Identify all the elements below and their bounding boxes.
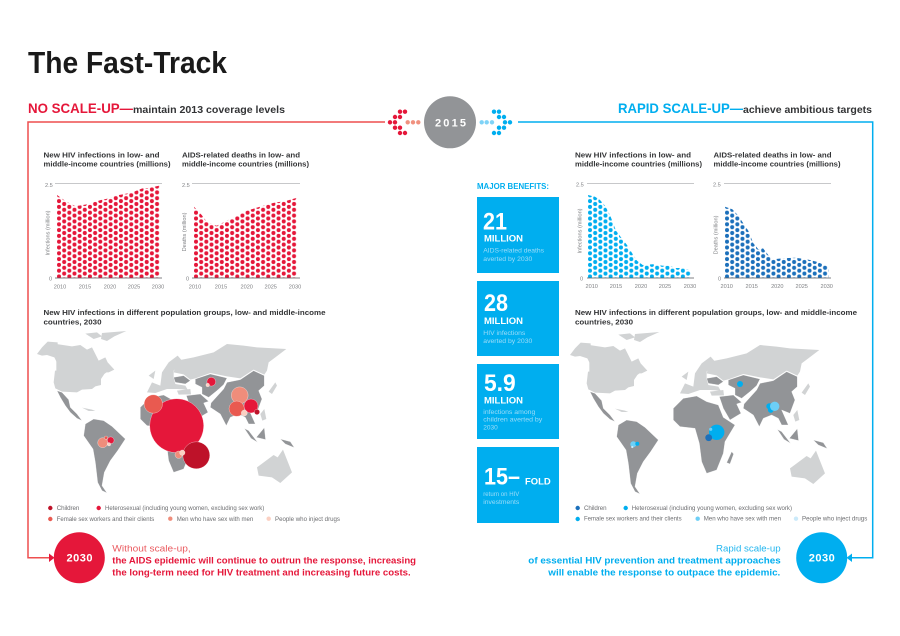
chart: new infections, rapid scale-up: New HIV infections in low- and: [575, 150, 692, 159]
chart: new infections, rapid scale-up: [575, 150, 703, 290]
chart: deaths, no scale-up: 2025: [264, 284, 277, 290]
heading: map, no scale-up: [44, 308, 326, 326]
map: rapid scale-up: [570, 332, 827, 494]
chart: deaths, no scale-up: 2010: [189, 284, 201, 290]
benefit panel: 21 million: MILLION: [484, 234, 523, 244]
conclusion: no scale-up: the long-term need for HIV treatment and increasing future costs.: [112, 568, 411, 579]
chart: new infections, no scale-up: 2030: [152, 284, 164, 290]
heading: map, rapid scale-up: [575, 308, 857, 326]
chart: deaths, no scale-up: AIDS-related deaths in low- and: [182, 150, 301, 159]
chart: deaths, rapid scale-up: Deaths (million): [714, 215, 720, 254]
conclusion: rapid scale-up: will enable the response to outpace the epidemic.: [547, 568, 780, 579]
chart: deaths, rapid scale-up: 2015: [745, 284, 758, 290]
2030 marker: rapid scale-up: 2030: [809, 553, 835, 565]
benefit panel: 5.9 million: infections among: [483, 409, 536, 416]
red frame arrow: [28, 122, 385, 562]
conclusion: no scale-up: the AIDS epidemic will continue to outrun the response, increasing: [112, 556, 416, 566]
benefit panel: 28 million: 28: [484, 290, 508, 317]
benefit panel: 15-fold: investments: [483, 499, 520, 506]
chart: new infections, no scale-up: [44, 150, 171, 290]
chart: deaths, no scale-up: [182, 150, 310, 290]
chart: deaths, rapid scale-up: middle-income countries (millions): [714, 160, 841, 169]
benefit panel: 28 million: averted by 2030: [483, 338, 533, 345]
benefit panel: 5.9 million: MILLION: [484, 395, 523, 405]
chart: new infections, rapid scale-up: 2010: [585, 284, 598, 290]
chart: new infections, no scale-up: 2025: [128, 284, 140, 290]
2030 marker: no scale-up: 2030: [66, 553, 92, 565]
legend: no scale-up: Children: [57, 505, 80, 512]
chart: new infections, rapid scale-up: 2015: [610, 284, 622, 290]
chart: new infections, no scale-up: 2015: [79, 284, 91, 290]
heading: rapid scale-up: achieve ambitious targets: [743, 104, 872, 116]
benefit panel: 21 million: 21: [483, 208, 507, 235]
chart: new infections, rapid scale-up: 2030: [684, 284, 696, 290]
legend: rapid scale-up: Heterosexual (including young women, excluding sex work): [632, 505, 792, 512]
legend: no scale-up: People who inject drugs: [275, 516, 340, 523]
2030 marker: no scale-up: [54, 532, 105, 583]
bubbles: rapid scale-up: [630, 381, 779, 448]
heading: map, no scale-up: New HIV infections in different population groups, low- and middle-income: [44, 308, 326, 317]
chart: new infections, rapid scale-up: 0: [580, 276, 583, 282]
chart: new infections, rapid scale-up: 2.5: [576, 182, 584, 188]
blue frame arrow: [518, 122, 873, 562]
heading: map, rapid scale-up: countries, 2030: [575, 317, 633, 326]
chart: new infections, no scale-up: Infections (million): [46, 210, 52, 256]
chart: new infections, rapid scale-up: 2025: [659, 284, 671, 290]
legend: rapid scale-up: [576, 505, 867, 523]
chart: new infections, no scale-up: 2020: [104, 284, 116, 290]
legend: rapid scale-up: People who inject drugs: [802, 516, 867, 523]
benefit panel: 28 million: [477, 281, 559, 356]
chart: new infections, no scale-up: 2010: [54, 284, 66, 290]
chart: new infections, no scale-up: 0: [49, 276, 52, 282]
chart: deaths, rapid scale-up: 2025: [795, 284, 808, 290]
chart: deaths, rapid scale-up: [713, 150, 841, 290]
legend: rapid scale-up: Female sex workers and their clients: [584, 516, 682, 523]
title: The Fast-Track: [28, 45, 228, 80]
conclusion: rapid scale-up: Rapid scale-up: [716, 544, 781, 555]
conclusion: no scale-up: Without scale-up,: [112, 544, 191, 555]
chart: deaths, rapid scale-up: 2.5: [713, 182, 721, 188]
chart: new infections, rapid scale-up: Infections (million): [578, 208, 584, 254]
benefit panel: 5.9 million: 5.9: [484, 370, 516, 397]
2030 marker: rapid scale-up: [796, 532, 847, 583]
heading: rapid scale-up: [618, 100, 872, 116]
legend: rapid scale-up: Children: [584, 505, 607, 512]
benefit panel: 5.9 million: children averted by: [483, 417, 543, 424]
chart: deaths, no scale-up: 0: [186, 276, 189, 282]
legend: no scale-up: [48, 505, 340, 523]
legend: no scale-up: Female sex workers and their clients: [57, 516, 154, 523]
benefit panel: 15-fold: FOLD: [525, 476, 551, 486]
benefit panel: 15-fold: 15–: [484, 463, 520, 490]
benefit panel: 21 million: averted by 2030: [483, 256, 533, 263]
legend: no scale-up: Men who have sex with men: [177, 516, 254, 523]
chart: new infections, no scale-up: New HIV infections in low- and: [44, 150, 160, 159]
chart: deaths, no scale-up: 2.5: [182, 183, 190, 189]
legend: rapid scale-up: Men who have sex with men: [704, 516, 782, 523]
chart: deaths, no scale-up: middle-income countries (millions): [182, 160, 310, 169]
benefit panel: 28 million: HIV infections: [483, 330, 526, 337]
chart: deaths, rapid scale-up: 0: [718, 276, 721, 282]
map: no scale-up: [37, 331, 294, 493]
heading: rapid scale-up: RAPID SCALE-UP—: [618, 100, 743, 116]
conclusion: rapid scale-up: of essential HIV prevention and treatment approaches: [528, 556, 781, 566]
benefit panel: 21 million: [477, 197, 559, 273]
heading: map, no scale-up: countries, 2030: [44, 317, 102, 326]
benefit panel: 15-fold: [477, 447, 559, 523]
chart: new infections, rapid scale-up: middle-income countries (millions): [575, 160, 703, 169]
benefit panel: 15-fold: return on HIV: [483, 491, 520, 498]
timeline marker 2015: [388, 96, 512, 148]
chart: new infections, rapid scale-up: 2020: [635, 284, 647, 290]
heading: map, rapid scale-up: New HIV infections in different population groups, low- and middle-income: [575, 308, 857, 317]
heading: no scale-up: [28, 100, 285, 116]
heading: no scale-up: maintain 2013 coverage levels: [133, 104, 285, 116]
chart: deaths, rapid scale-up: AIDS-related deaths in low- and: [714, 150, 832, 159]
benefit panel: 21 million: AIDS-related deaths: [483, 248, 545, 255]
conclusion: no scale-up: [112, 544, 416, 579]
benefit panel: 28 million: MILLION: [484, 316, 523, 326]
chart: deaths, no scale-up: Deaths (million): [182, 212, 188, 251]
benefit panel: 5.9 million: 2030: [483, 424, 498, 431]
chart: deaths, rapid scale-up: 2030: [820, 284, 833, 290]
heading: no scale-up: NO SCALE-UP—: [28, 100, 133, 116]
bubbles: no scale-up: [98, 377, 260, 469]
chart: deaths, no scale-up: 2030: [289, 284, 301, 290]
timeline marker 2015: 2015: [435, 118, 466, 130]
benefit panel: 5.9 million: [477, 364, 559, 439]
heading: major benefits: MAJOR BENEFITS:: [477, 182, 549, 191]
chart: new infections, no scale-up: 2.5: [45, 183, 53, 189]
chart: deaths, rapid scale-up: 2020: [771, 284, 784, 290]
chart: deaths, no scale-up: 2020: [240, 284, 253, 290]
legend: no scale-up: Heterosexual (including young women, excluding sex work): [105, 505, 264, 512]
chart: deaths, rapid scale-up: 2010: [720, 284, 733, 290]
conclusion: rapid scale-up: [528, 544, 781, 579]
chart: deaths, no scale-up: 2015: [215, 284, 227, 290]
chart: new infections, no scale-up: middle-income countries (millions): [44, 160, 171, 169]
